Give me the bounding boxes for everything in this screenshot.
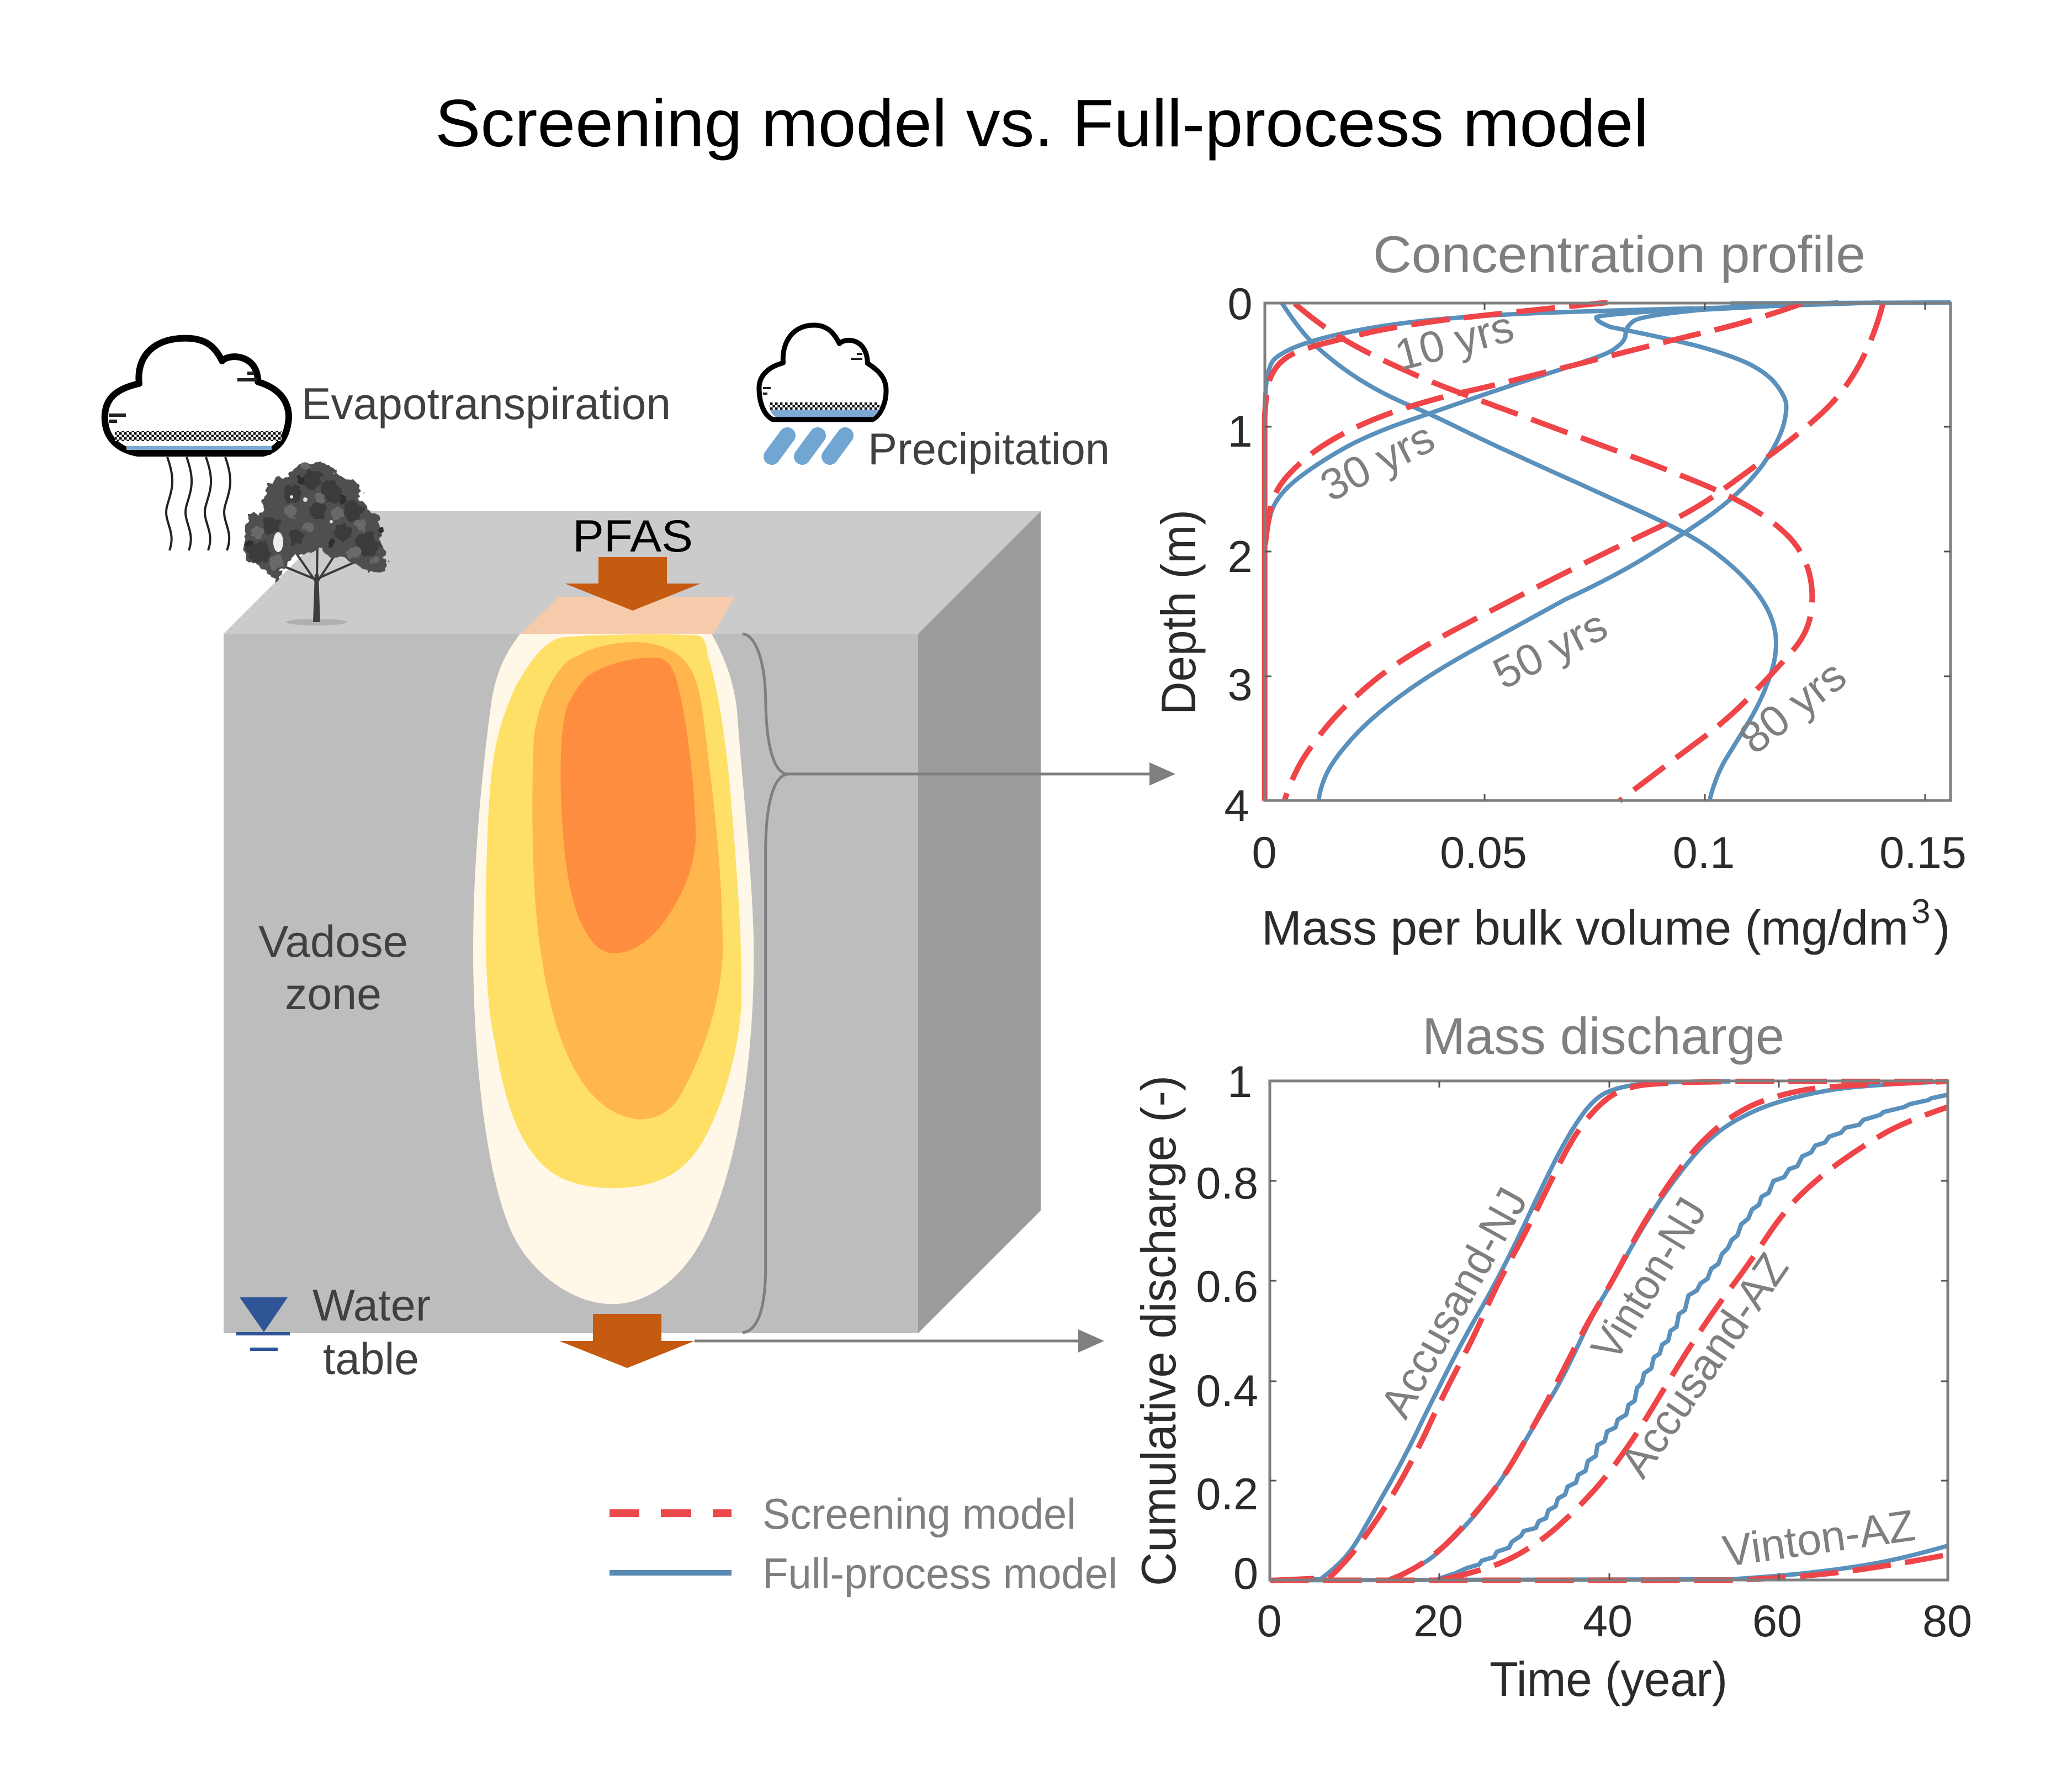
arrow: discharge to water table [559,1314,695,1368]
brace: vadose zone to concentration profile [743,634,788,1333]
icon: water table symbol [236,1297,290,1351]
x axis tick labels: 0 [1257,1597,1282,1646]
curve label: 80 yrs: 80 yrs [1730,650,1855,763]
label: vadose zone [258,917,408,1019]
arrow: to concentration profile [787,762,1175,786]
label: evapotranspiration: Evapotranspiration [301,379,671,429]
y axis tick labels: 2 [1227,532,1253,582]
y axis tick labels: 0.6 [1196,1262,1258,1312]
curve label: 50 yrs: 50 yrs [1485,600,1615,698]
x axis label: 3 [1911,893,1930,931]
PFAS label: PFAS [573,511,693,561]
soil block top face [224,511,1041,634]
y axis tick labels: 0.4 [1196,1366,1258,1416]
title: Screening model vs. Full-process model [435,86,1649,161]
curves: concentration profiles [1264,303,1951,801]
icon: evapotranspiration cloud [105,338,289,455]
icon: rain streaks [772,436,845,457]
icon: tree [244,462,386,625]
curve label: 30 yrs: 30 yrs [1312,412,1442,511]
arrow: to mass discharge [695,1329,1104,1353]
legend [610,1489,1117,1598]
heading: mass discharge: Mass discharge [1422,1007,1784,1065]
curve label: 10 yrs: 10 yrs [1390,301,1519,380]
y axis tick labels: 0 [1233,1549,1258,1599]
label: water table: table [323,1334,419,1384]
x axis label: ) [1934,900,1950,955]
label: water table [312,1281,431,1384]
panel: concentration profile chart [1151,225,1967,955]
label: water table: Water [312,1281,431,1330]
legend: full-process model label: Full-process model [762,1549,1117,1598]
y axis tick labels: 0 [1227,279,1253,329]
x axis label: Mass per bulk volume (mg/dm [1262,900,1909,955]
y axis tick labels: 3 [1227,660,1253,710]
arrow: PFAS input [565,557,701,611]
curve label: Accusand-NJ: Accusand-NJ [1371,1180,1537,1425]
y axis label: Cumulative discharge (-) [1131,1075,1186,1586]
label: vadose zone: zone [285,969,381,1019]
icon: precipitation cloud [759,325,886,420]
x axis tick labels: 0.05 [1440,828,1527,878]
y axis tick labels: 0.2 [1196,1470,1258,1519]
y axis tick labels: 1 [1227,1057,1252,1107]
panel: mass discharge chart [1131,1007,1972,1706]
legend: full-process model swatch [610,1570,732,1576]
legend: screening model label: Screening model [762,1489,1076,1538]
axes frame and ticks [1270,1081,1948,1580]
soil block side face [918,511,1041,1333]
y axis tick labels [1196,1057,1258,1599]
soil block front face [224,634,918,1333]
y axis tick labels [1224,279,1253,831]
x axis tick labels: 40 [1583,1597,1633,1646]
PFAS plume contours [473,634,754,1304]
legend: screening model swatch [610,1509,732,1517]
x axis tick labels: 0.1 [1673,828,1735,878]
curve label: Vinton-NJ: Vinton-NJ [1581,1189,1716,1369]
x axis tick labels: 0.15 [1879,828,1967,878]
x axis tick labels: 0 [1252,828,1277,878]
icon: evaporation wavy lines [166,457,230,550]
label: vadose zone: Vadose [258,917,408,967]
x axis tick labels [1252,828,1967,878]
x axis tick labels: 20 [1413,1597,1463,1646]
y axis label: Depth (m) [1151,510,1206,715]
y axis tick labels: 0.8 [1196,1159,1258,1208]
heading: concentration profile: Concentration profile [1373,225,1866,283]
label: precipitation: Precipitation [868,425,1110,474]
x axis label: Time (year) [1490,1652,1727,1706]
curves: cumulative discharge [1270,1081,1948,1581]
x axis tick labels: 60 [1752,1597,1802,1646]
x axis tick labels [1257,1597,1972,1646]
PFAS source area [520,597,735,634]
y axis tick labels: 1 [1227,407,1253,457]
curve label: Vinton-AZ: Vinton-AZ [1720,1500,1918,1576]
y axis tick labels: 4 [1224,781,1249,831]
panel: soil block diagram [224,511,1175,1384]
x axis tick labels: 80 [1922,1597,1972,1646]
curve label: Accusand-AZ: Accusand-AZ [1610,1244,1798,1486]
axes frame and ticks [1265,303,1951,800]
